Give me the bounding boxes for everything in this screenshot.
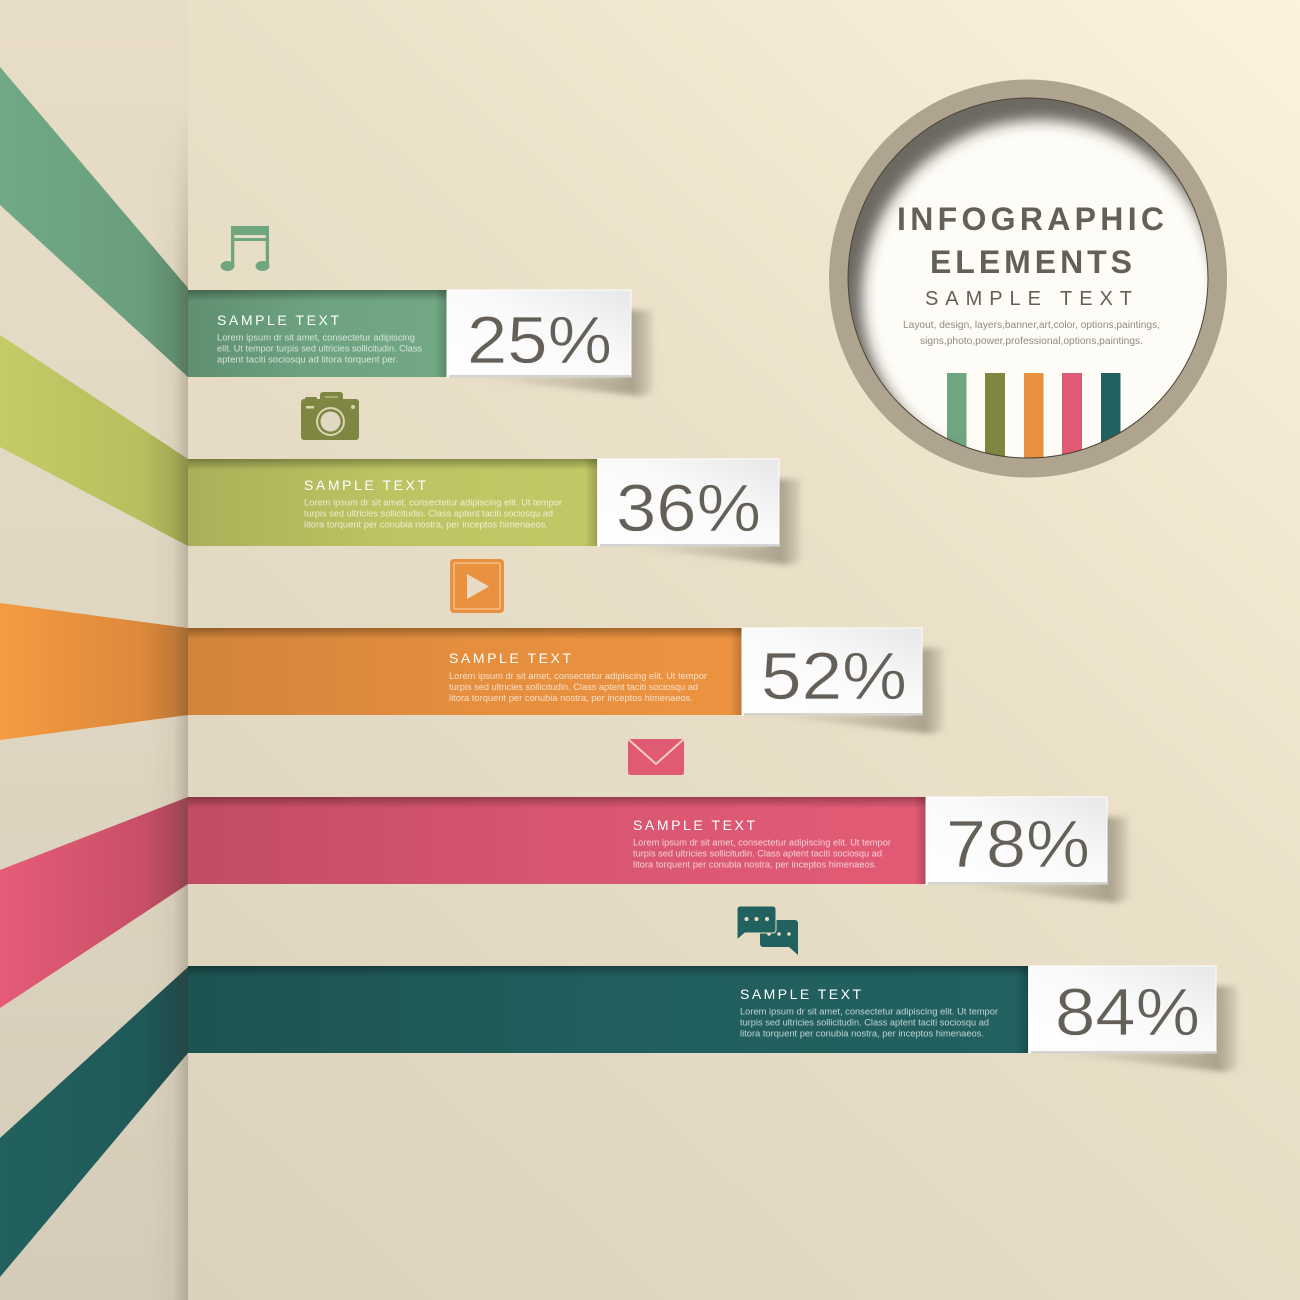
bar body text: Lorem ipsum dr sit amet, consectetur adipiscing elit. Ut tempor bbox=[633, 838, 891, 848]
bar body text: litora torquent per conubia nostra, per inceptos himenaeos. bbox=[740, 1028, 984, 1040]
percentage card bbox=[1029, 966, 1216, 1054]
bar 2: lime 36% bbox=[188, 459, 779, 546]
percentage card bbox=[447, 290, 631, 378]
percentage card bbox=[598, 459, 779, 546]
percentage card: 78% bbox=[946, 807, 1090, 882]
bar 1: green 25% bbox=[188, 290, 631, 378]
percentage card bbox=[742, 628, 922, 716]
bar body text bbox=[304, 498, 562, 530]
percentage card bbox=[926, 797, 1107, 884]
colour stripes bbox=[947, 373, 1120, 458]
bar body text: litora torquent per conubia nostra, per inceptos himenaeos. bbox=[449, 693, 693, 704]
bar fill bbox=[188, 966, 1028, 1053]
ribbon group: coloured strips converging on the fold bbox=[0, 67, 188, 1277]
bar 5: teal 84% bbox=[188, 966, 1216, 1054]
heading: INFOGRAPHIC bbox=[897, 201, 1164, 237]
ribbon: green bbox=[0, 67, 188, 377]
bar body text bbox=[633, 838, 891, 870]
bar body text: Lorem ipsum dr sit amet, consectetur adipiscing bbox=[217, 332, 415, 344]
heading line 2: ELEMENTS bbox=[930, 244, 1132, 280]
bar body text bbox=[217, 332, 422, 366]
icon: camera bbox=[301, 392, 359, 440]
bar fill bbox=[188, 628, 742, 715]
bar 4: pink 78% bbox=[188, 797, 1107, 884]
bar body text: turpis sed ultricies sollicitudin. Class aptent taciti sociosqu ad bbox=[449, 682, 698, 693]
description: signs,photo,power,professional,options,paintings. bbox=[920, 335, 1143, 347]
bar body text: elit. Ut tempor turpis sed ultricies sollicitudin. Class bbox=[217, 344, 422, 354]
icon: play button bbox=[450, 559, 504, 613]
ribbon: teal bbox=[0, 967, 188, 1277]
icon: music note bbox=[220, 226, 270, 271]
bar body text: litora torquent per conubia nostra, per inceptos himenaeos. bbox=[633, 860, 877, 870]
inner shadow bbox=[848, 98, 1208, 438]
bar body text: turpis sed ultricies sollicitudin. Class aptent taciti sociosqu ad bbox=[740, 1018, 989, 1028]
percentage card: 84% bbox=[1055, 975, 1200, 1050]
bar body text bbox=[449, 671, 707, 704]
bar heading: SAMPLE TEXT bbox=[633, 817, 755, 833]
ribbon: orange bbox=[0, 603, 188, 740]
left folded panel bbox=[0, 0, 188, 1300]
ribbon: lime bbox=[0, 335, 188, 546]
bar heading: SAMPLE TEXT bbox=[449, 650, 571, 666]
bar body text: Lorem ipsum dr sit amet, consectetur adipiscing elit. Ut tempor bbox=[740, 1006, 998, 1018]
bar heading: SAMPLE TEXT bbox=[304, 477, 426, 493]
ribbon: pink bbox=[0, 797, 188, 1008]
bar body text: turpis sed ultricies sollicitudin. Class aptent taciti sociosqu ad bbox=[633, 848, 882, 860]
bar heading: SAMPLE TEXT bbox=[217, 312, 339, 328]
description: Layout, design, layers,banner,art,color, options,paintings, bbox=[903, 319, 1160, 331]
icon: speech bubbles bbox=[737, 906, 798, 955]
percentage card: 36% bbox=[616, 471, 761, 546]
subheading: SAMPLE TEXT bbox=[925, 288, 1132, 310]
bar body text: Lorem ipsum dr sit amet, consectetur adipiscing elit. Ut tempor bbox=[449, 671, 707, 682]
bar fill bbox=[188, 459, 597, 546]
outer ring bbox=[829, 80, 1227, 478]
bar body text: Lorem ipsum dr sit amet, consectetur adipiscing elit. Ut tempor bbox=[304, 498, 562, 508]
percentage card: 25% bbox=[467, 303, 612, 378]
card shadows bbox=[460, 310, 1238, 1072]
percentage card: 52% bbox=[761, 639, 907, 714]
title badge circle bbox=[829, 80, 1227, 478]
bar 3: orange 52% bbox=[188, 628, 922, 716]
bar heading: SAMPLE TEXT bbox=[740, 986, 861, 1002]
bar body text bbox=[740, 1006, 998, 1040]
description bbox=[903, 319, 1160, 347]
bar body text: aptent taciti sociosqu ad litora torquent per. bbox=[217, 354, 398, 366]
icon: envelope bbox=[628, 739, 684, 775]
bar body text: litora torquent per conubia nostra, per inceptos himenaeos. bbox=[304, 520, 548, 530]
bar fill bbox=[188, 797, 926, 884]
bar body text: turpis sed ultricies sollicitudin. Class aptent taciti sociosqu ad bbox=[304, 508, 553, 520]
inner disc bbox=[848, 98, 1208, 458]
fold shadow bbox=[174, 140, 188, 1300]
bar fill bbox=[188, 290, 447, 377]
